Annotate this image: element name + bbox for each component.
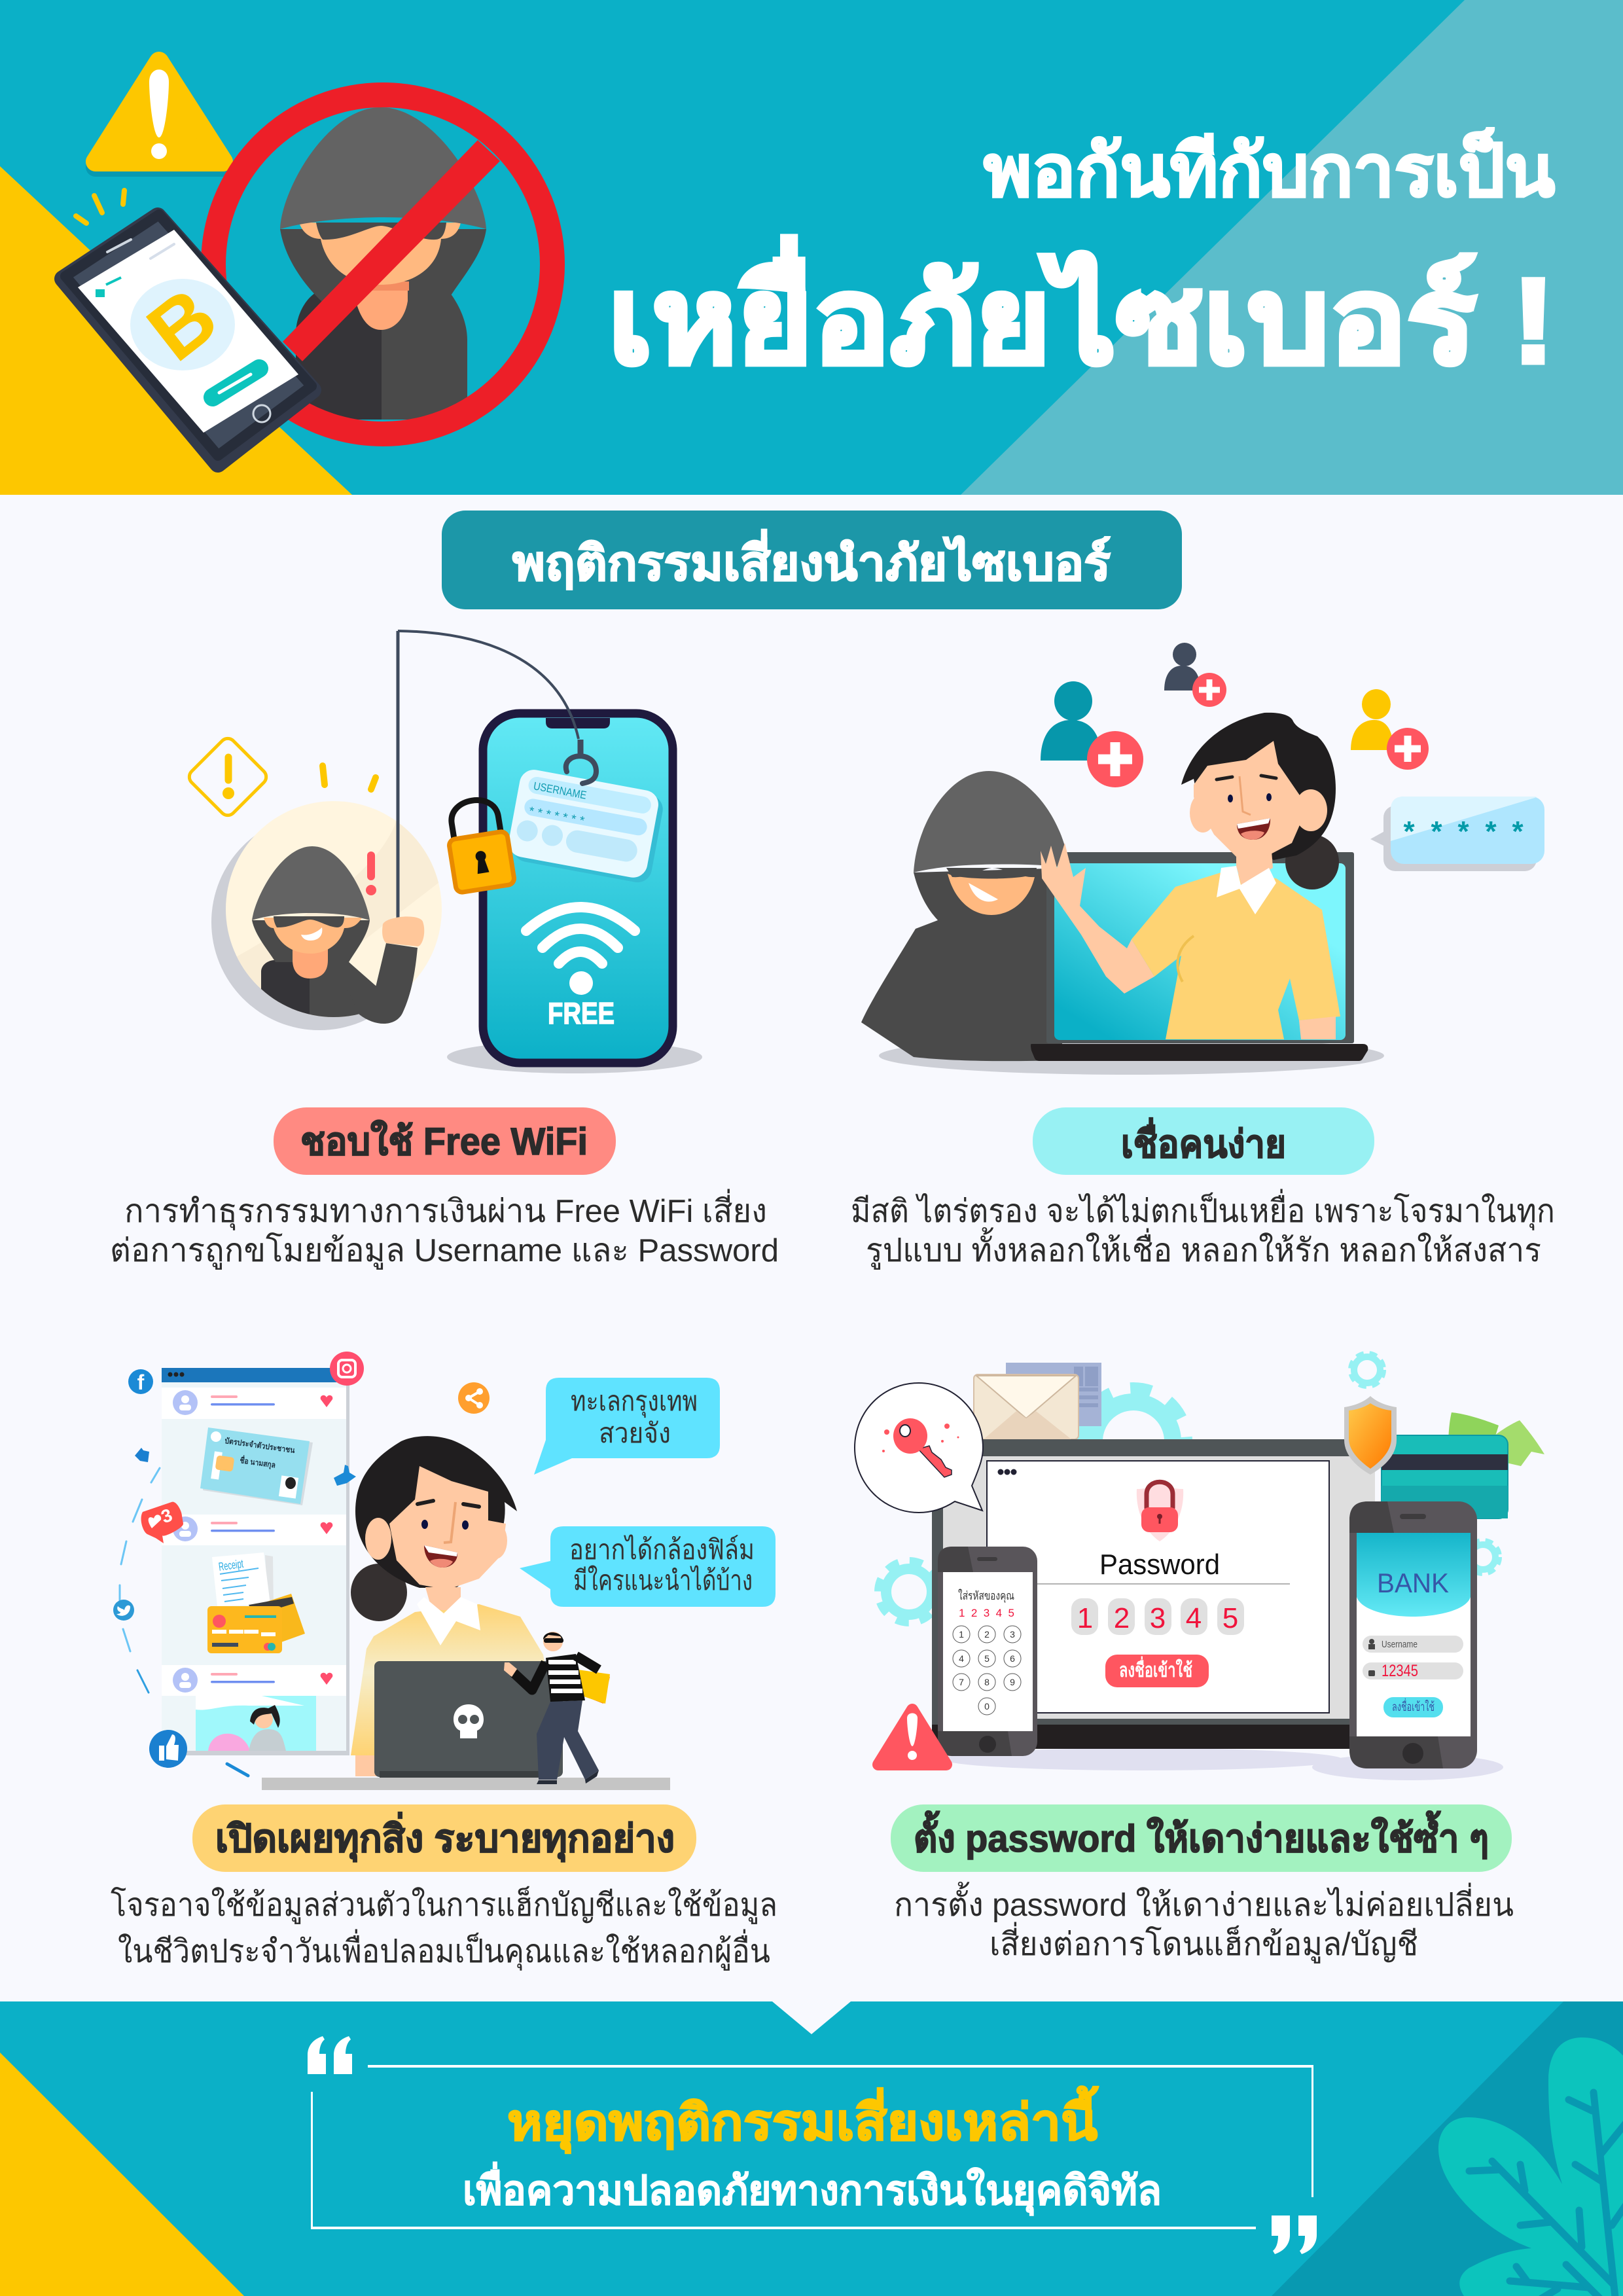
hacked laptop: [374, 1661, 563, 1778]
speech bubble: bangkok sea: สวยจัง: [599, 1418, 671, 1448]
selfie photo: [196, 1696, 316, 1751]
right phone bank app: 12345: [1382, 1662, 1418, 1680]
social icons: 3: [158, 1505, 175, 1527]
icon: lock with shield: [1137, 1482, 1183, 1541]
key speech bubble: [855, 1383, 983, 1513]
badge: likes free wifi: [274, 1107, 616, 1175]
login card: [506, 767, 666, 885]
left phone: 6: [1010, 1653, 1015, 1664]
hacker in spotlight: [211, 801, 442, 1030]
shield: [1344, 1396, 1397, 1475]
social icons: [113, 1352, 490, 1768]
password speech bubble: *: [1485, 816, 1497, 848]
description: โจรอาจใช้ข้อมูลส่วนตัวในการแฮ็กบัญชีและใช้ข้อมูล: [111, 1886, 777, 1924]
digit chips 12345: 4: [1186, 1602, 1202, 1634]
woman: [1041, 713, 1340, 1039]
envelope: [974, 1363, 1101, 1439]
left phone: 9: [1010, 1677, 1015, 1687]
dashed orbit: [120, 1468, 248, 1776]
hacker head: [914, 771, 1069, 915]
icon: phone with bitcoin: [63, 215, 313, 464]
title: เหยื่อภัยไซเบอร์ !: [608, 236, 1555, 389]
panel: trusting people: [851, 643, 1555, 1270]
icon: opening quote: [308, 2036, 352, 2074]
title: [608, 128, 1555, 389]
icon: red warning triangle: [878, 1710, 946, 1765]
hacker hand: [382, 916, 424, 946]
section heading: [442, 511, 1182, 609]
illustration: devices and password: [855, 1353, 1544, 1780]
description: [894, 1882, 1514, 1964]
illustration: phishing over free wifi: FREE: [548, 996, 615, 1030]
password speech bubble: *: [1512, 816, 1524, 848]
leaves: [1438, 2037, 1623, 2296]
login card: * * * * * * *: [528, 804, 586, 827]
badge: trusts people easily: เชื่อคนง่าย: [1121, 1117, 1286, 1166]
icon: key: [882, 1418, 959, 1477]
wallet and credit cards: [207, 1594, 305, 1653]
login button: [1105, 1655, 1209, 1687]
illustration: phishing over free wifi: [186, 631, 702, 1073]
panel: weak password: [855, 1353, 1544, 1964]
speech bubble: bangkok sea: ทะเลกรุงเทพ: [571, 1386, 698, 1418]
password speech bubble: [1370, 797, 1544, 871]
left phone: 4: [959, 1653, 964, 1664]
badge: trusts people easily: [1033, 1107, 1374, 1175]
right phone bank app: ลงชื่อเข้าใช้: [1392, 1698, 1435, 1714]
left phone: 1: [959, 1629, 964, 1640]
laptop: [1031, 852, 1368, 1061]
woman with bun: [351, 1436, 562, 1776]
right phone bank app: Username: [1382, 1639, 1418, 1650]
password label: Password: [1099, 1549, 1220, 1581]
description: [110, 1189, 779, 1270]
panel: oversharing: [111, 1352, 777, 1971]
social feed window: [162, 1368, 349, 1755]
speech bubble: bangkok sea: [534, 1378, 720, 1475]
description: [851, 1189, 1555, 1270]
closing message: หยุดพฤติกรรมเสี่ยงเหล่านี้: [507, 2086, 1099, 2154]
credit card: [1382, 1435, 1508, 1518]
description: ในชีวิตประจำวันเพื่อปลอมเป็นคุณและใช้หลอกผู้อื่น: [118, 1929, 770, 1971]
right phone bank app: [1349, 1501, 1477, 1768]
left phone: 8: [984, 1677, 990, 1687]
badge: overshares everything: เปิดเผยทุกสิ่ง ระบายทุกอย่าง: [215, 1812, 675, 1863]
id card: ชื่อ นามสกุล: [239, 1454, 276, 1471]
header banner: [0, 0, 1623, 495]
description: การทำธุรกรรมทางการเงินผ่าน Free WiFi เสี่ยง: [124, 1189, 767, 1230]
closing message: เพื่อความปลอดภัยทางการเงินในยุคดิจิทัล: [463, 2162, 1162, 2215]
icon: add teal person: [1041, 681, 1143, 787]
login button: ลงชื่อเข้าใช้: [1119, 1656, 1192, 1681]
icon: wifi: [526, 907, 635, 995]
icon: closing quote: [1272, 2215, 1317, 2254]
digit chips 12345: [1071, 1598, 1244, 1635]
password speech bubble: *: [1431, 816, 1442, 848]
title: พอกันทีกับการเป็น: [984, 128, 1555, 211]
left phone: 0: [984, 1701, 990, 1712]
footer banner: [0, 2001, 1623, 2296]
icon: warning triangle: [96, 62, 223, 167]
left phone: 2: [984, 1629, 990, 1640]
login card: USERNAME: [533, 780, 588, 802]
id card: บัตรประจำตัวประชาชน: [224, 1436, 296, 1455]
description: [111, 1886, 777, 1971]
receipt: [212, 1552, 274, 1610]
digit chips 12345: 2: [1114, 1602, 1130, 1634]
section heading: พฤติกรรมเสี่ยงนำภัยไซเบอร์: [512, 529, 1111, 590]
alert ticks: [323, 766, 376, 789]
hacker body: [861, 868, 1073, 1061]
icon: add dark person: [1164, 643, 1226, 707]
badge: easy reused password: [891, 1804, 1512, 1872]
badge: easy reused password: ตั้ง password ให้เดาง่ายและใช้ซ้ำ ๆ: [914, 1811, 1489, 1860]
icon: alert ticks: [76, 190, 124, 223]
speech bubble: film camera: อยากได้กล้องฟิล์ม: [569, 1534, 755, 1565]
description: ต่อการถูกขโมยข้อมูล Username และ Password: [110, 1232, 779, 1270]
money: [1448, 1412, 1544, 1466]
quote frame: [311, 2065, 1313, 2229]
icon: phone with bitcoin: B: [131, 270, 234, 378]
speech bubble: film camera: [520, 1526, 776, 1607]
description: การตั้ง password ให้เดาง่ายและไม่ค่อยเปลี่ยน: [894, 1882, 1514, 1923]
icon: padlock: [443, 796, 515, 893]
digit chips 12345: 5: [1222, 1602, 1238, 1634]
table: [262, 1778, 670, 1790]
digit chips 12345: 1: [1077, 1602, 1093, 1634]
floor shadows: [943, 1748, 1503, 1780]
right phone bank app: BANK: [1377, 1568, 1449, 1598]
id card: [200, 1427, 313, 1505]
laptop: [932, 1439, 1375, 1749]
digit chips 12345: 3: [1150, 1602, 1166, 1634]
illustration: hacker and woman on laptop: [861, 643, 1544, 1075]
left phone: 7: [959, 1677, 964, 1687]
description: มีสติ ไตร่ตรอง จะได้ไม่ตกเป็นเหยื่อ เพราะโจรมาในทุก: [851, 1189, 1555, 1230]
hacker portrait: [280, 107, 486, 420]
icon: add yellow person: [1351, 689, 1429, 770]
badge: likes free wifi: ชอบใช้ Free WiFi: [300, 1119, 588, 1163]
left phone: 12345: [959, 1607, 1014, 1619]
password speech bubble: *: [1457, 816, 1469, 848]
panel: free wifi: [110, 631, 779, 1270]
receipt: Receipt: [218, 1557, 244, 1573]
badge: overshares everything: [192, 1804, 696, 1872]
icon: red exclamation: [366, 852, 376, 895]
icon: prohibition sign: [213, 95, 552, 434]
speech bubble: film camera: มีใครแนะนำได้บ้าง: [573, 1565, 753, 1596]
social icons: f: [137, 1371, 145, 1394]
left phone: 3: [1010, 1629, 1015, 1640]
fishing rod: [398, 631, 596, 920]
left phone: ใส่รหัสของคุณ: [958, 1588, 1014, 1603]
description: เสี่ยงต่อการโดนแฮ็กข้อมูล/บัญชี: [990, 1922, 1418, 1964]
icon: warning diamond: [186, 735, 270, 819]
closing message: [463, 2086, 1162, 2215]
illustration: social feed and woman: [113, 1352, 776, 1790]
password speech bubble: *: [1403, 816, 1415, 848]
gears: [878, 1353, 1500, 1623]
left phone: 5: [984, 1653, 990, 1664]
description: รูปแบบ ทั้งหลอกให้เชื่อ หลอกให้รัก หลอกให้สงสาร: [866, 1227, 1541, 1270]
thief: [504, 1632, 610, 1784]
left phone: [938, 1547, 1037, 1756]
